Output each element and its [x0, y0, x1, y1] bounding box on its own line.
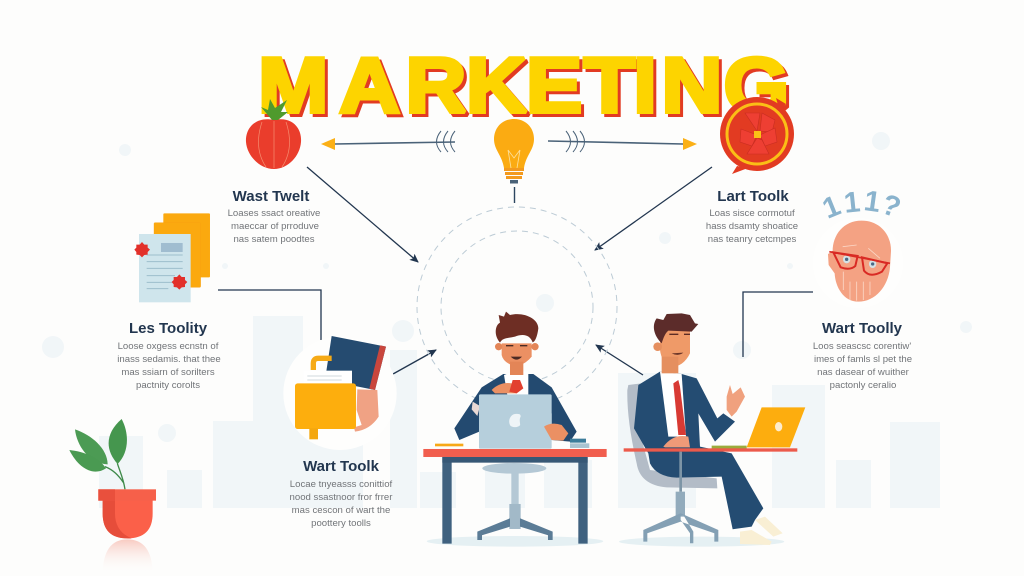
- question marks: [818, 185, 905, 226]
- text block: Wast Twelt: [228, 188, 320, 245]
- text block: Wart Toolk: mas cescon of wart the: [292, 505, 390, 516]
- question marks: 1: [862, 185, 882, 219]
- text block: Wart Toolk: nood ssastnoor fror frrer: [290, 492, 393, 503]
- text block: Wast Twelt: maeccar of prroduve: [231, 221, 319, 232]
- dashed circles: [417, 207, 617, 407]
- icon: light bulb: [494, 119, 534, 203]
- title: MARKETING: [261, 46, 792, 132]
- text block: Wast Twelt: Loases ssact oreative: [228, 208, 320, 219]
- connector: right elbow: [743, 292, 813, 357]
- desk: [624, 448, 797, 452]
- text block: Wart Toolly: Wart Toolly: [822, 320, 903, 337]
- chair: [477, 463, 553, 540]
- title: MARKETING: [258, 43, 789, 129]
- icon: documents: [134, 213, 210, 302]
- connector: left elbow: [218, 290, 321, 340]
- hand and phone: [492, 383, 517, 393]
- desk: [423, 449, 607, 457]
- text block: Les Toolity: Loose oxgess ecnstn of: [118, 341, 219, 352]
- yellow laptop: [747, 407, 805, 447]
- shoes: [740, 530, 772, 545]
- text block: Lart Toolk: Loas sisce cormotuf: [709, 208, 795, 219]
- text block: Wart Toolk: [290, 458, 393, 529]
- raised hand: [727, 385, 745, 417]
- text block: Wart Toolly: [813, 320, 912, 391]
- illustration: man at desk: [423, 312, 607, 547]
- background skyline: [42, 132, 972, 508]
- text block: Wart Toolk: Locae tnyeasss conittiof: [290, 479, 393, 490]
- text block: Lart Toolk: hass dsamty shoatice: [706, 221, 798, 232]
- connector: folder to center: [393, 350, 436, 374]
- text block: Les Toolity: inass sedamis. that thee: [117, 354, 221, 365]
- text block: Wast Twelt: nas satem poodtes: [233, 234, 315, 245]
- text block: Les Toolity: [117, 320, 221, 391]
- arrow: right: [548, 131, 697, 152]
- question marks: ?: [877, 188, 905, 225]
- chair: [627, 383, 718, 543]
- laptop: [479, 394, 552, 449]
- icon: red badge: [720, 97, 794, 174]
- text block: Lart Toolk: Lart Toolk: [717, 188, 789, 205]
- icon: potted plant: [69, 419, 156, 573]
- text block: Les Toolity: mas ssiarn of sorilters: [121, 367, 215, 378]
- head: [502, 343, 532, 367]
- text block: Lart Toolk: [706, 188, 798, 245]
- text block: Les Toolity: pactnity corolts: [136, 380, 200, 391]
- icon: thinking man's head: [813, 185, 905, 308]
- head: [660, 330, 690, 367]
- text block: Wart Toolk: Wart Toolk: [303, 458, 380, 475]
- body: [634, 372, 763, 529]
- question marks: 1: [842, 186, 862, 220]
- connector: top left: [307, 167, 418, 262]
- connector: seated man to center: [596, 345, 643, 375]
- text block: Wart Toolk: poottery toolls: [311, 518, 371, 529]
- icon: folder with book: [283, 336, 397, 450]
- connector: top right: [595, 167, 712, 250]
- arrow: left: [321, 131, 455, 152]
- torso: [454, 374, 577, 442]
- question marks: 1: [818, 190, 845, 226]
- text block: Wart Toolly: Loos seascsc corentiw': [813, 341, 911, 352]
- text block: Lart Toolk: nas teanry cetcmpes: [708, 234, 796, 245]
- text block: Wast Twelt: Wast Twelt: [233, 188, 309, 205]
- text block: Wart Toolly: imes of famls sl pet the: [814, 354, 912, 365]
- text block: Wart Toolly: pactonly ceralio: [830, 380, 896, 391]
- text block: Les Toolity: Les Toolity: [129, 320, 208, 337]
- text block: Wart Toolly: nas dasear of wuither: [817, 367, 910, 378]
- illustration: seated man: [619, 313, 805, 547]
- icon: tomato: [246, 99, 301, 169]
